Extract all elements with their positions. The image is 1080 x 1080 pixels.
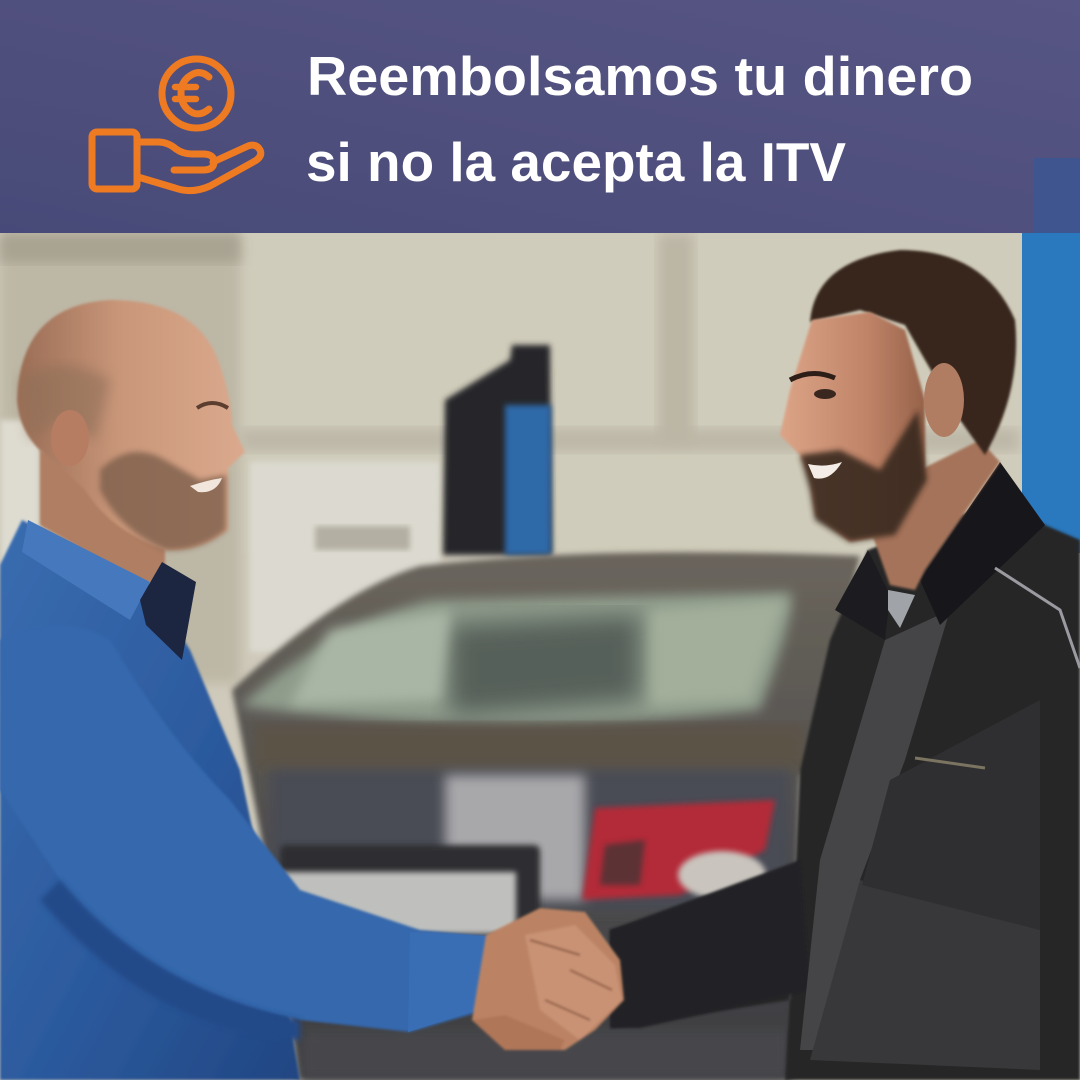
photo: garage background bbox=[0, 233, 1080, 1080]
photo: mechanic in dark jacket bbox=[610, 250, 1080, 1080]
hair bbox=[810, 250, 1016, 455]
heading line 2: si no la acepta la ITV bbox=[306, 131, 846, 193]
photo: man in blue shirt bbox=[0, 300, 488, 1080]
inner overalls bbox=[800, 610, 950, 1050]
icon: euro coin bbox=[162, 59, 231, 128]
t-shirt and neck bbox=[888, 590, 915, 628]
photo: blurred car bbox=[232, 552, 860, 1080]
icon: open hand bbox=[138, 142, 261, 191]
ear bbox=[51, 410, 89, 466]
shirt torso bbox=[0, 520, 300, 1080]
head bbox=[17, 300, 245, 550]
collar bbox=[920, 462, 1045, 625]
heading line 1: Reembolsamos tu dinero bbox=[307, 45, 973, 107]
blue lift column bbox=[1022, 233, 1080, 553]
neck bbox=[40, 450, 165, 585]
header band bbox=[0, 0, 1080, 233]
face bbox=[780, 312, 925, 542]
title bbox=[306, 45, 973, 193]
icon: hand holding euro coin bbox=[92, 59, 261, 191]
icon: sleeve bbox=[92, 132, 137, 189]
shoulder seam bbox=[995, 568, 1080, 668]
beard bbox=[800, 410, 927, 542]
stubble bbox=[100, 452, 226, 550]
eye and smile bbox=[790, 373, 835, 380]
pocket bbox=[915, 758, 985, 768]
jacket bbox=[610, 500, 1080, 1080]
photo: handshake bbox=[472, 908, 624, 1050]
eye and smile bbox=[197, 403, 228, 408]
arm and sleeve bbox=[0, 625, 488, 1032]
ear bbox=[924, 363, 964, 437]
collar bbox=[22, 520, 150, 620]
